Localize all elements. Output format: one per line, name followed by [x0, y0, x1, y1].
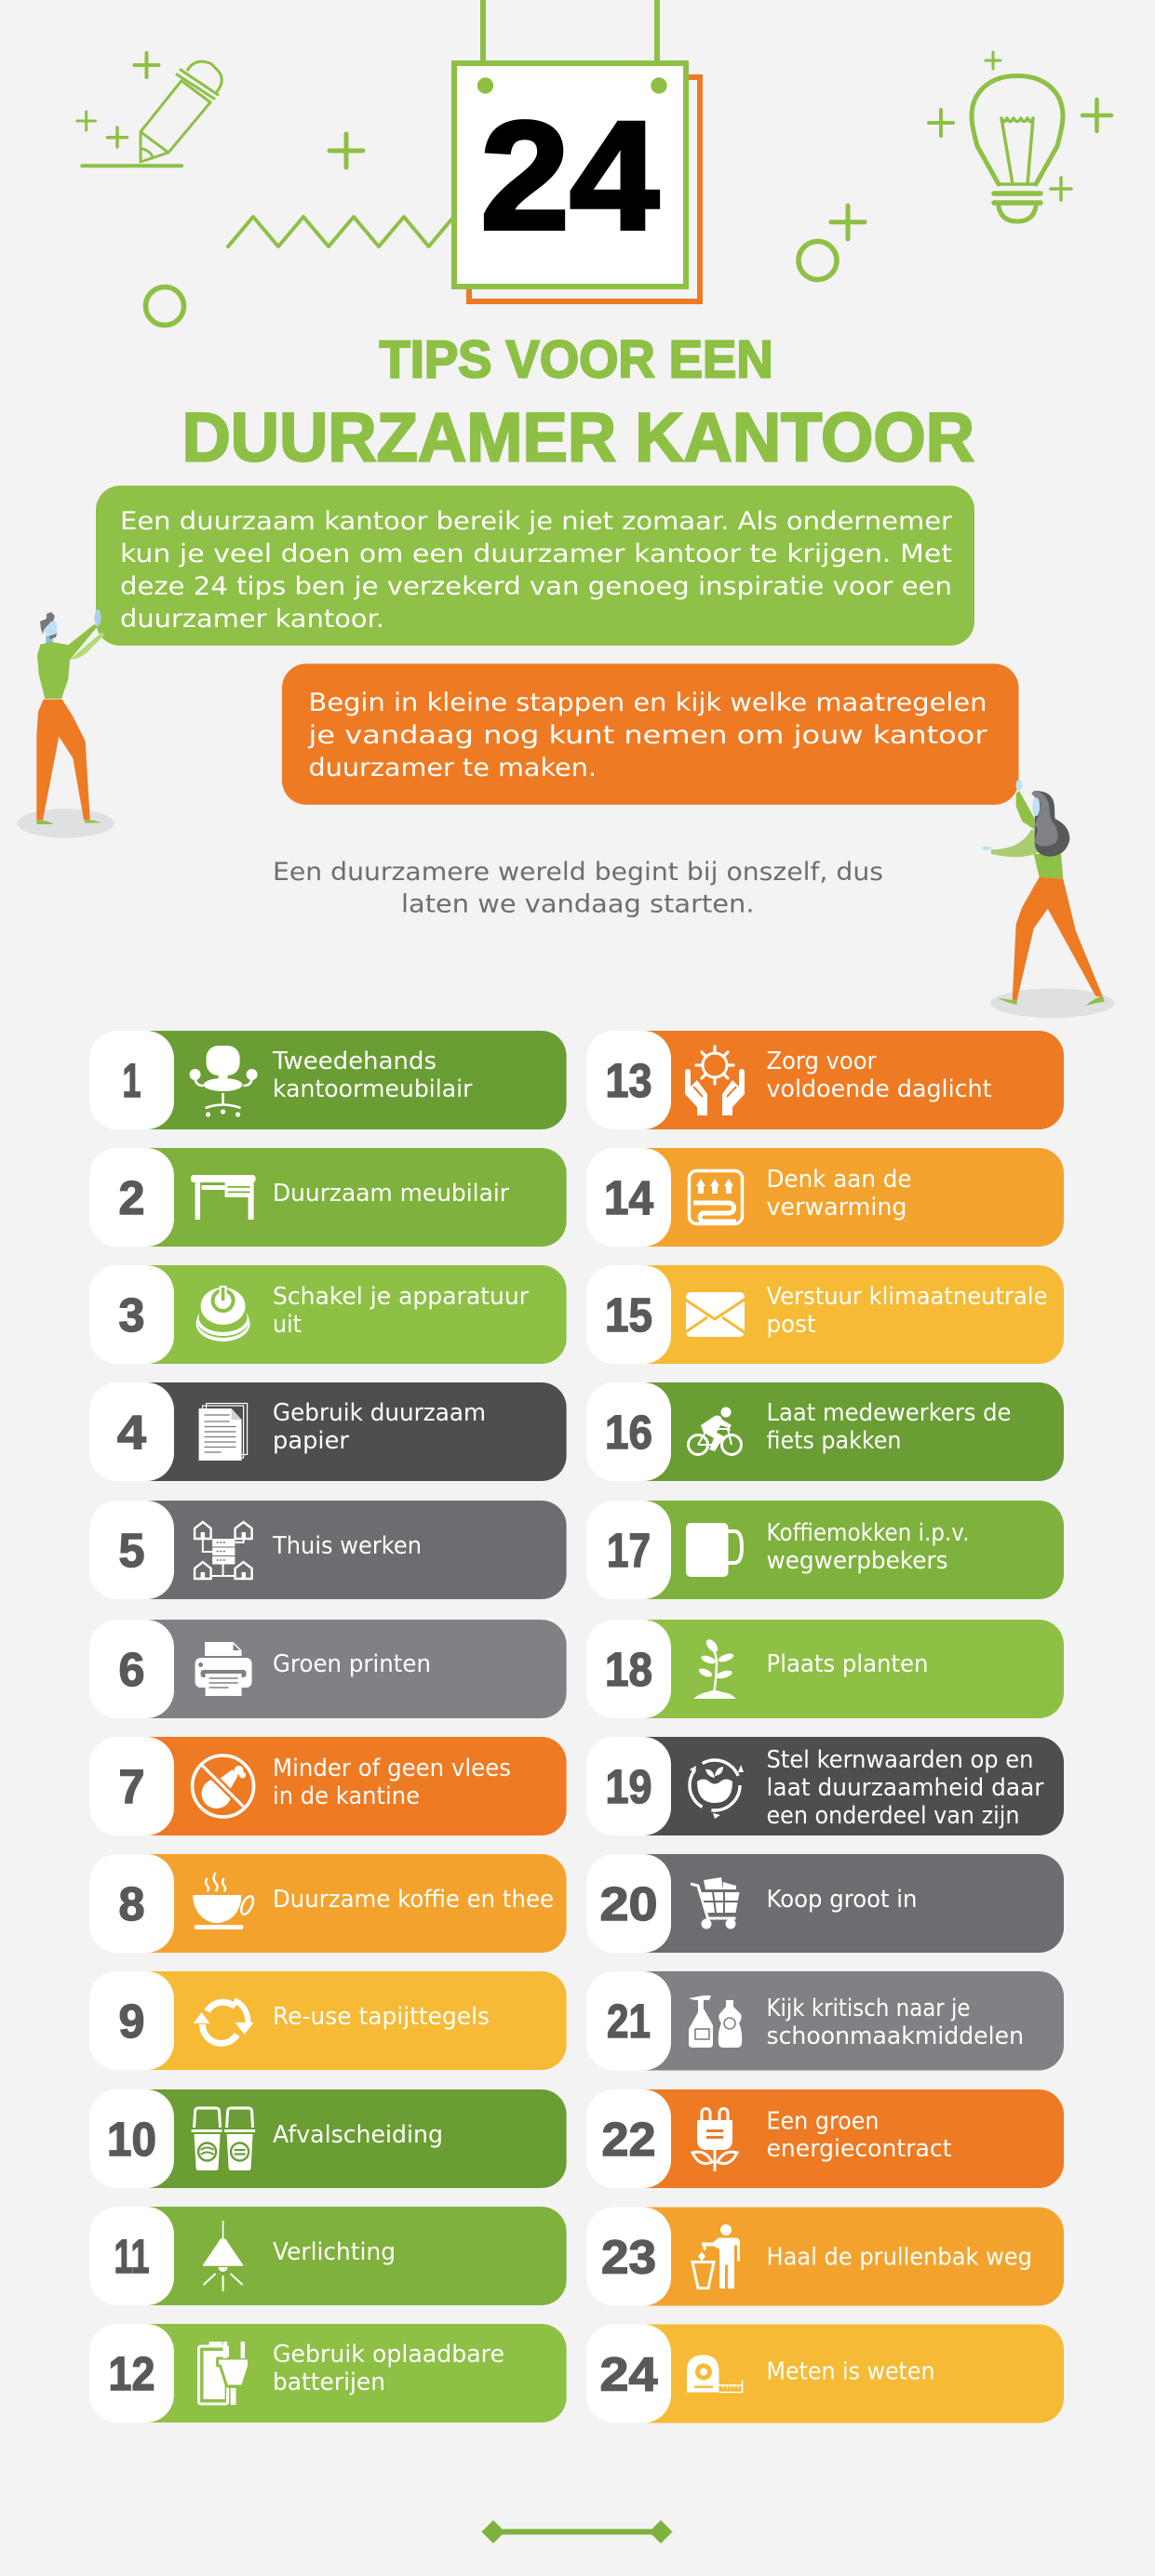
tip text: kantoormeubilair [273, 1075, 473, 1103]
number 17: 17 [607, 1524, 651, 1577]
panel: orange intro bubble: je vandaag nog kunt nemen om jouw kantoor [307, 721, 988, 750]
tip card 19 [586, 1737, 1064, 1835]
footer divider [482, 2520, 672, 2543]
icon: desk [191, 1175, 256, 1220]
number 22: 22 [601, 2113, 655, 2166]
icon: mug [686, 1523, 742, 1577]
number 21: 21 [607, 1995, 651, 2048]
number 5: 5 [119, 1524, 145, 1577]
tip text: Haal de prullenbak weg [767, 2244, 1032, 2272]
number 15: 15 [605, 1288, 652, 1341]
icon: office chair [190, 1046, 258, 1117]
panel: orange intro bubble [282, 664, 1018, 805]
tip text: Koffiemokken i.p.v. [767, 1519, 970, 1547]
tip text [767, 1166, 912, 1221]
number 11: 11 [114, 2230, 149, 2283]
tip text: Kijk kritisch naar je [767, 1995, 970, 2022]
icon: cyclist [689, 1407, 741, 1455]
tip card 20 [586, 1854, 1064, 1953]
calendar with number 24 [454, 0, 700, 301]
icon: printer [195, 1642, 252, 1696]
icon: tape measure [687, 2356, 743, 2393]
tip text [273, 2341, 504, 2396]
panel: orange intro bubble: duurzamer te maken. [309, 754, 597, 782]
text block: closing statement [273, 858, 883, 919]
tip text: fiets pakken [767, 1427, 901, 1455]
icon: envelope [684, 1292, 745, 1337]
tip card 9 [89, 1971, 567, 2070]
panel: green intro bubble: Een duurzaam kantoor bereik je niet zomaar. Als ondernemer [120, 507, 953, 536]
number 12: 12 [108, 2347, 154, 2400]
icon: cleaning bottles [689, 1995, 742, 2048]
panel: green intro bubble: kun je veel doen om een duurzamer kantoor te krijgen. Met [120, 540, 952, 568]
tip card 10 [89, 2089, 567, 2188]
title [182, 329, 974, 476]
tip card 12 [89, 2324, 567, 2423]
number 10: 10 [107, 2113, 156, 2166]
tip text: Denk aan de [767, 1166, 912, 1194]
text block: closing statement: laten we vandaag starten. [401, 889, 754, 919]
icon: rechargeable battery [199, 2342, 249, 2405]
number 14: 14 [604, 1171, 654, 1224]
tip text: Koop groot in [767, 1886, 918, 1914]
icon: network of houses [195, 1522, 252, 1579]
tip text: uit [273, 1311, 302, 1339]
tip text: papier [273, 1427, 350, 1455]
number 2: 2 [119, 1171, 145, 1224]
tip text: Tweedehands [272, 1048, 436, 1075]
number 9: 9 [119, 1995, 145, 2048]
tip card 4 [89, 1382, 567, 1481]
tip text: Verlichting [273, 2238, 396, 2266]
decorative plus signs and shapes [77, 53, 865, 326]
tip card 23 [586, 2207, 1064, 2305]
number 16: 16 [605, 1406, 652, 1459]
tip text: in de kantine [273, 1782, 420, 1810]
tip text: Minder of geen vlees [273, 1755, 511, 1782]
tip text: Gebruik oplaadbare [273, 2341, 504, 2369]
number 8: 8 [119, 1877, 145, 1930]
tip text: Gebruik duurzaam [273, 1399, 486, 1427]
calendar with number 24: 24 [480, 90, 659, 262]
tip card 17 [586, 1501, 1064, 1599]
tip text: een onderdeel van zijn [767, 1802, 1020, 1830]
tip text [767, 1746, 1044, 1830]
icon: plant [693, 1637, 736, 1699]
tip card 5 [89, 1501, 567, 1599]
number 7: 7 [119, 1760, 145, 1813]
tip card 15 [586, 1265, 1064, 1364]
tip card 22 [586, 2089, 1064, 2188]
tip text: laat duurzaamheid daar [767, 1774, 1044, 1802]
number 24: 24 [599, 2348, 658, 2400]
tip card 21 [586, 1971, 1064, 2071]
tip text: Duurzame koffie en thee [273, 1886, 554, 1914]
tip card 13 [586, 1031, 1064, 1129]
tip text: schoonmaakmiddelen [767, 2022, 1024, 2050]
tip text: Afvalscheiding [273, 2121, 443, 2149]
icon: power button [196, 1286, 250, 1341]
icon: person at bin [692, 2224, 740, 2289]
icon: coffee cup [193, 1873, 256, 1929]
number 1: 1 [123, 1054, 141, 1107]
tip text: verwarming [767, 1194, 907, 1221]
tip text: post [767, 1311, 815, 1339]
tip text: Stel kernwaarden op en [767, 1746, 1033, 1774]
tip text: Verstuur klimaatneutrale [767, 1283, 1048, 1311]
tip text: Een groen [767, 2108, 879, 2136]
tip text [767, 1995, 1024, 2050]
tip card 2 [89, 1148, 567, 1247]
tip text: Meten is weten [767, 2357, 934, 2385]
icon: shopping cart [691, 1877, 739, 1929]
icon: pendant lamp [204, 2221, 243, 2291]
tip text: Schakel je apparatuur [273, 1283, 530, 1311]
icon: floor heating [689, 1170, 743, 1224]
tip text: Plaats planten [767, 1650, 929, 1678]
figure: person left holding bubble [18, 609, 114, 838]
tip card 3 [89, 1265, 567, 1364]
icon: pencil [82, 61, 222, 166]
panel: green intro bubble: deze 24 tips ben je verzekerd van genoeg inspiratie voor een [120, 572, 952, 601]
tip text: batterijen [273, 2369, 385, 2396]
tip text: Thuis werken [272, 1532, 422, 1560]
tip card 24 [586, 2324, 1064, 2423]
number 18: 18 [605, 1643, 652, 1696]
icon: light bulb [929, 52, 1111, 221]
tip text: Groen printen [273, 1650, 431, 1678]
number 13: 13 [605, 1054, 651, 1107]
tip text [767, 1399, 1011, 1455]
number 4: 4 [117, 1406, 147, 1459]
tip text: Laat medewerkers de [767, 1399, 1011, 1427]
number 23: 23 [601, 2231, 656, 2283]
tip card 11 [89, 2207, 567, 2305]
tip text: wegwerpbekers [767, 1547, 947, 1575]
icon: sun and hands [685, 1047, 745, 1115]
tip text: voldoende daglicht [767, 1075, 992, 1103]
icon: waste bins [192, 2108, 255, 2170]
tip card 16 [586, 1382, 1064, 1481]
tip text [767, 1519, 970, 1575]
tip text: Zorg voor [767, 1048, 877, 1075]
tip card 8 [89, 1854, 567, 1953]
tip text: Re-use tapijttegels [273, 2003, 490, 2031]
tip text [273, 1399, 486, 1455]
title: TIPS VOOR EEN [380, 329, 773, 389]
tip card 14 [586, 1148, 1064, 1247]
tip card 6 [89, 1620, 567, 1718]
number 20: 20 [599, 1877, 657, 1930]
tip card 7 [89, 1737, 567, 1835]
tip text [767, 2108, 951, 2163]
number 6: 6 [119, 1643, 145, 1696]
title: DUURZAMER KANTOOR [182, 398, 974, 476]
tip text: energiecontract [767, 2135, 951, 2163]
tip card 1 [89, 1031, 567, 1129]
figure: person right holding bubble [981, 780, 1114, 1018]
panel: green intro bubble [96, 486, 974, 646]
icon: recycle arrows [194, 2000, 254, 2043]
number 19: 19 [605, 1760, 651, 1813]
icon: no meat [193, 1755, 254, 1817]
tip text [767, 1048, 992, 1103]
number 3: 3 [119, 1288, 145, 1341]
icon: green energy plug [692, 2108, 737, 2171]
tip text [272, 1048, 473, 1103]
panel: green intro bubble: duurzamer kantoor. [120, 605, 384, 634]
panel: orange intro bubble: Begin in kleine stappen en kijk welke maatregelen [309, 688, 987, 717]
tip card 18 [586, 1620, 1064, 1718]
text block: closing statement: Een duurzamere wereld begint bij onszelf, dus [273, 858, 883, 887]
tip text: Duurzaam meubilair [273, 1180, 509, 1208]
icon: paper stack [199, 1403, 248, 1461]
icon: sustainability cycle [690, 1760, 744, 1819]
tip text [273, 1283, 530, 1339]
tip text [767, 1283, 1048, 1339]
tip text [273, 1755, 511, 1810]
